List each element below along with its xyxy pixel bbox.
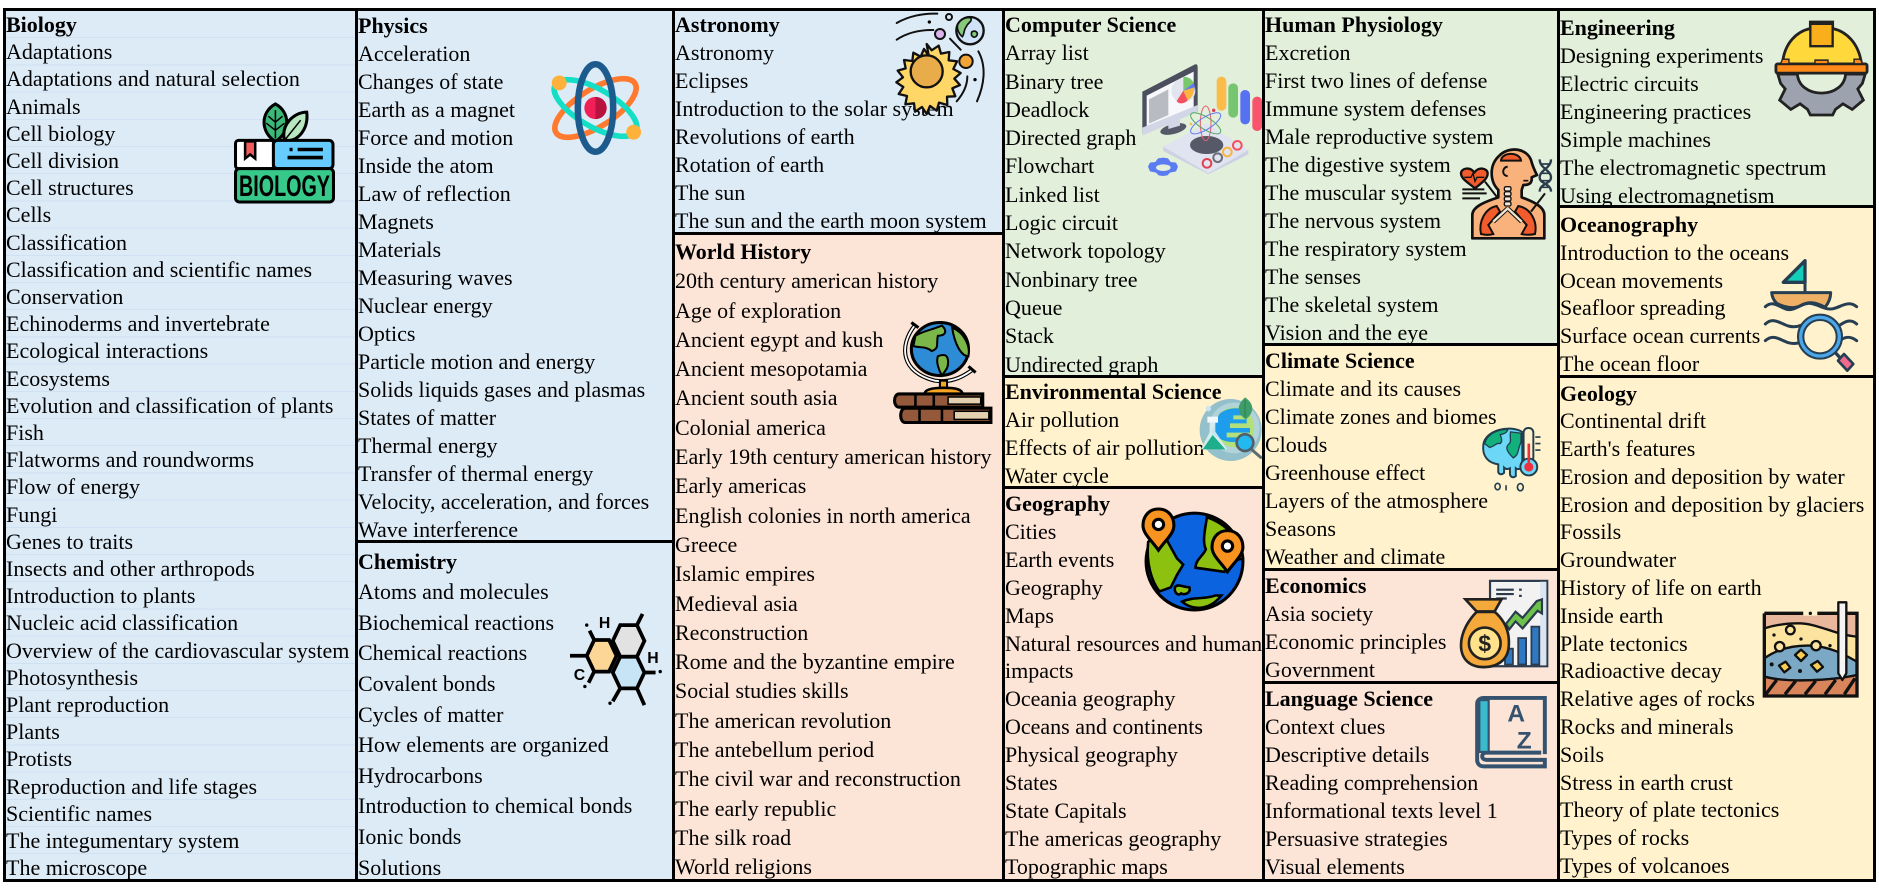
topic list: Geography: Earth events xyxy=(1005,547,1114,572)
heading: Physics: Physics xyxy=(358,13,428,38)
topic list: Computer Science: Undirected graph xyxy=(1005,352,1158,377)
topic list: Computer Science: Nonbinary tree xyxy=(1005,267,1138,292)
topic list: World History: Colonial america xyxy=(675,415,826,440)
topic list: Physics: Inside the atom xyxy=(358,153,494,178)
topic list: Geography: Oceania geography xyxy=(1005,686,1175,711)
heading: Climate Science: Climate Science xyxy=(1265,348,1415,373)
topic list: Computer Science xyxy=(1005,40,1166,377)
topic list: Economics: Government xyxy=(1265,657,1375,682)
topic list: World History: Greece xyxy=(675,532,737,557)
topic list: Physics: Force and motion xyxy=(358,125,513,150)
icon: globe on books xyxy=(893,321,992,424)
topic list: Geology: History of life on earth xyxy=(1560,575,1762,600)
topic list: Biology: Ecological interactions xyxy=(6,338,208,363)
topic list: World History: The american revolution xyxy=(675,708,891,733)
topic list: Environmental Science: Air pollution xyxy=(1005,407,1119,432)
topic list: Geography: Maps xyxy=(1005,603,1054,628)
heading: Language Science: Language Science xyxy=(1265,686,1433,711)
topic list: Chemistry: Covalent bonds xyxy=(358,671,496,696)
panel: Chemistry xyxy=(358,543,672,879)
topic list: Computer Science: Stack xyxy=(1005,323,1054,348)
topic list: Biology: Fungi xyxy=(6,502,57,527)
topic list: Geology: Plate tectonics xyxy=(1560,631,1688,656)
topic list: World History: Medieval asia xyxy=(675,591,798,616)
topic list: Biology: Cells xyxy=(6,202,51,227)
topic list: Human Physiology: The senses xyxy=(1265,264,1361,289)
icon: chemistry molecule xyxy=(570,613,662,706)
topic list: Geography: Geography xyxy=(1005,575,1103,600)
topic list: Climate Science: Climate zones and biomes xyxy=(1265,404,1497,429)
topic list: Chemistry: Solutions xyxy=(358,855,441,880)
topic list: Physics: Thermal energy xyxy=(358,433,497,458)
icon: environment flask and earth xyxy=(1200,397,1262,461)
topic list: Engineering: Designing experiments xyxy=(1560,43,1763,68)
panel: Language Science xyxy=(1265,684,1557,879)
icon: engineering helmet and gear xyxy=(1774,20,1868,116)
topic list: Biology xyxy=(6,39,349,880)
topic list: Biology: Introduction to plants xyxy=(6,583,195,608)
topic list: Climate Science xyxy=(1265,376,1497,569)
panel: Oceanography xyxy=(1560,208,1873,375)
topic list: Biology: Conservation xyxy=(6,284,123,309)
topic list: Geography: impacts xyxy=(1005,658,1073,683)
icon: human physiology figure xyxy=(1460,148,1552,240)
topic list: Geology: Groundwater xyxy=(1560,547,1676,572)
topic list: Oceanography: Ocean movements xyxy=(1560,268,1723,293)
topic list: Biology: Fish xyxy=(6,420,44,445)
heading: World History: World History xyxy=(675,239,811,264)
topic list: Biology: The microscope xyxy=(6,855,147,880)
topic list: World History: Rome and the byzantine empire xyxy=(675,649,955,674)
topic list: World History: The antebellum period xyxy=(675,737,874,762)
topic list: Economics: Asia society xyxy=(1265,601,1373,626)
topic list: Biology: The integumentary system xyxy=(6,828,239,853)
heading: Engineering: Engineering xyxy=(1560,15,1675,40)
icon: computer science workstation xyxy=(1142,64,1262,176)
topic list: Human Physiology: Male reproductive system xyxy=(1265,124,1494,149)
heading: Human Physiology: Human Physiology xyxy=(1265,12,1443,37)
topic list: Physics: Acceleration xyxy=(358,41,470,66)
topic list: Biology: Plants xyxy=(6,719,60,744)
icon: chemistry molecule: C xyxy=(574,667,585,684)
topic list: Computer Science: Logic circuit xyxy=(1005,210,1118,235)
topic list: Geography: Cities xyxy=(1005,519,1056,544)
topic list: Biology: Plant reproduction xyxy=(6,692,169,717)
topic list: Astronomy: Astronomy xyxy=(675,40,774,65)
topic list: Human Physiology: Immune system defenses xyxy=(1265,96,1486,121)
topic list: Human Physiology xyxy=(1265,40,1494,345)
topic list: Geology xyxy=(1560,408,1864,878)
topic list: Chemistry: Biochemical reactions xyxy=(358,610,554,635)
topic list: Computer Science: Flowchart xyxy=(1005,153,1094,178)
topic list: Computer Science: Array list xyxy=(1005,40,1089,65)
topic list: Astronomy: The sun xyxy=(675,180,745,205)
topic list: Geology: Types of volcanoes xyxy=(1560,853,1730,878)
icon: oceanography boat and magnifier xyxy=(1764,259,1858,372)
icon: chemistry molecule: H xyxy=(647,650,659,667)
topic list: Language Science: Informational texts level 1 xyxy=(1265,798,1498,823)
topic list: Astronomy xyxy=(675,40,987,233)
panel: Economics xyxy=(1265,571,1557,681)
topic list: Chemistry: Chemical reactions xyxy=(358,640,527,665)
icon: language A to Z book xyxy=(1475,696,1547,768)
topic list: Computer Science: Binary tree xyxy=(1005,69,1103,94)
heading: Geology: Geology xyxy=(1560,380,1637,406)
topic list: Human Physiology: Vision and the eye xyxy=(1265,320,1428,345)
topic list: World History: The silk road xyxy=(675,825,791,850)
icon: language A to Z book: A xyxy=(1507,701,1525,728)
topic list: Oceanography: Surface ocean currents xyxy=(1560,323,1760,348)
topic list: World History: Ancient egypt and kush xyxy=(675,327,883,352)
topic list: Engineering: The electromagnetic spectrum xyxy=(1560,155,1826,180)
topic list: Oceanography xyxy=(1560,240,1789,376)
panel: Computer Science xyxy=(1005,11,1262,375)
icon: solar system xyxy=(895,12,985,116)
topic list: Computer Science: Deadlock xyxy=(1005,97,1089,122)
topic list: Physics xyxy=(358,41,649,542)
heading: Computer Science: Computer Science xyxy=(1005,12,1176,37)
topic list: World History: Early americas xyxy=(675,473,806,498)
topic list: Geology: Erosion and deposition by water xyxy=(1560,464,1845,489)
topic list: World History: 20th century american history xyxy=(675,268,938,293)
topic list: Physics: Law of reflection xyxy=(358,181,511,206)
topic list: Engineering xyxy=(1560,43,1826,208)
topic list: World History: Ancient mesopotamia xyxy=(675,356,867,381)
topic list: Geography: Physical geography xyxy=(1005,742,1178,767)
topic list: Computer Science: Queue xyxy=(1005,295,1062,320)
topic list: Biology: Flow of energy xyxy=(6,474,140,499)
topic list: Human Physiology: First two lines of defense xyxy=(1265,68,1487,93)
heading: Oceanography: Oceanography xyxy=(1560,212,1698,237)
topic list: Language Science xyxy=(1265,714,1498,879)
topic list: Economics: Economic principles xyxy=(1265,629,1446,654)
topic list: Human Physiology: The respiratory system xyxy=(1265,236,1467,261)
topic list: World History: Ancient south asia xyxy=(675,385,838,410)
topic list: Biology: Cell structures xyxy=(6,175,134,200)
topic list: Geology: Fossils xyxy=(1560,519,1621,544)
topic list: Geography xyxy=(1005,519,1262,879)
icon: atom xyxy=(551,61,642,155)
panel: Environmental Science xyxy=(1005,378,1262,486)
topic list: Climate Science: Weather and climate xyxy=(1265,544,1445,569)
panel: Physics xyxy=(358,11,672,540)
topic list: Biology: Protists xyxy=(6,746,72,771)
topic list: Physics: Particle motion and energy xyxy=(358,349,595,374)
panel: World History xyxy=(675,235,1002,879)
topic list: Geology: Rocks and minerals xyxy=(1560,714,1734,739)
topic list: Human Physiology: The digestive system xyxy=(1265,152,1451,177)
topic list: Biology: Animals xyxy=(6,94,81,119)
topic list: Computer Science: Directed graph xyxy=(1005,125,1136,150)
heading: Chemistry: Chemistry xyxy=(358,549,457,574)
topic list: Environmental Science: Effects of air pollution xyxy=(1005,435,1204,460)
topic list: Physics: Magnets xyxy=(358,209,434,234)
topic list: World History: The early republic xyxy=(675,796,836,821)
topic list: Chemistry: Introduction to chemical bonds xyxy=(358,793,632,818)
icon: biology book and leaves xyxy=(234,102,335,204)
topic list: Language Science: Visual elements xyxy=(1265,854,1405,879)
topic list: Biology: Insects and other arthropods xyxy=(6,556,255,581)
panel: Geography xyxy=(1005,489,1262,879)
topic list: Chemistry: How elements are organized xyxy=(358,732,609,757)
topic list: Language Science: Context clues xyxy=(1265,714,1385,739)
topic list: World History: Early 19th century american history xyxy=(675,444,991,469)
panel: Climate Science xyxy=(1265,346,1557,568)
topic list: Geology: Radioactive decay xyxy=(1560,658,1722,683)
heading: Economics: Economics xyxy=(1265,573,1366,598)
topic list: World History xyxy=(675,268,992,879)
topic list: Physics: Earth as a magnet xyxy=(358,97,515,122)
topic list: Geology: Theory of plate tectonics xyxy=(1560,797,1779,822)
topic list: Engineering: Electric circuits xyxy=(1560,71,1699,96)
topic list: Biology: Classification and scientific names xyxy=(6,257,312,282)
topic list: Biology: Reproduction and life stages xyxy=(6,774,257,799)
topic list: Engineering: Engineering practices xyxy=(1560,99,1751,124)
topic list: Biology: Echinoderms and invertebrate xyxy=(6,311,270,336)
topic list: World History: Reconstruction xyxy=(675,620,808,645)
topic list: Computer Science: Network topology xyxy=(1005,238,1166,263)
topic list: Physics: Wave interference xyxy=(358,517,518,542)
heading: Biology: Biology xyxy=(6,12,77,37)
topic list: Biology: Cell biology xyxy=(6,121,115,146)
topic list: Biology: Cell division xyxy=(6,148,119,173)
topic list: Biology: Adaptations xyxy=(6,39,112,64)
topic list: Climate Science: Clouds xyxy=(1265,432,1327,457)
topic list: Biology: Ecosystems xyxy=(6,366,110,391)
topic list: Astronomy: Rotation of earth xyxy=(675,152,824,177)
topic list: Biology: Overview of the cardiovascular system xyxy=(6,638,349,663)
topic list: World History: Age of exploration xyxy=(675,298,841,323)
topic list: Language Science: Reading comprehension xyxy=(1265,770,1478,795)
topic list: Economics xyxy=(1265,601,1446,682)
topic list: Chemistry: Ionic bonds xyxy=(358,824,461,849)
topic list: Physics: Nuclear energy xyxy=(358,293,493,318)
topic list: Astronomy: Revolutions of earth xyxy=(675,124,855,149)
topic list: Geography: Natural resources and human xyxy=(1005,631,1262,656)
topic list: Geology: Inside earth xyxy=(1560,603,1663,628)
topic list: Geology: Continental drift xyxy=(1560,408,1706,433)
heading: Astronomy: Astronomy xyxy=(675,12,780,37)
topic list: Human Physiology: The nervous system xyxy=(1265,208,1441,233)
topic list: Chemistry xyxy=(358,579,632,880)
topic list: Geology: Types of rocks xyxy=(1560,825,1689,850)
topic list: Physics: Velocity, acceleration, and forces xyxy=(358,489,649,514)
panel: Geology xyxy=(1560,378,1873,879)
topic list: Oceanography: The ocean floor xyxy=(1560,351,1699,376)
topic list: Geography: State Capitals xyxy=(1005,798,1127,823)
topic list: Language Science: Descriptive details xyxy=(1265,742,1429,767)
topic list: Physics: Changes of state xyxy=(358,69,503,94)
topic list: Chemistry: Hydrocarbons xyxy=(358,763,483,788)
topic list: Physics: Transfer of thermal energy xyxy=(358,461,593,486)
topic list: Biology: Classification xyxy=(6,230,127,255)
icon: geology soil layers xyxy=(1762,601,1859,698)
panel: Engineering xyxy=(1560,11,1873,205)
topic list: Physics: Solids liquids gases and plasmas xyxy=(358,377,645,402)
topic list: Astronomy: Introduction to the solar system xyxy=(675,96,954,121)
topic list: World History: Islamic empires xyxy=(675,561,815,586)
topic list: Environmental Science: Water cycle xyxy=(1005,463,1109,488)
topic list: Biology: Photosynthesis xyxy=(6,665,138,690)
topic list: Chemistry: Cycles of matter xyxy=(358,702,503,727)
topic list: Physics: Measuring waves xyxy=(358,265,513,290)
topic list: Climate Science: Climate and its causes xyxy=(1265,376,1461,401)
topic list: Computer Science: Linked list xyxy=(1005,182,1100,207)
topic list: Oceanography: Seafloor spreading xyxy=(1560,295,1726,320)
topic list: Climate Science: Layers of the atmosphere xyxy=(1265,488,1488,513)
topic list: Biology: Evolution and classification of plants xyxy=(6,393,334,418)
topic list: Geology: Stress in earth crust xyxy=(1560,770,1733,795)
topic list: Geology: Relative ages of rocks xyxy=(1560,686,1755,711)
topic list: Chemistry: Atoms and molecules xyxy=(358,579,549,604)
topic list: Physics: States of matter xyxy=(358,405,496,430)
panel: Astronomy xyxy=(675,11,1002,232)
topic list: World History: World religions xyxy=(675,854,812,879)
topic list: Biology: Genes to traits xyxy=(6,529,133,554)
icon: climate melting earth and thermometer xyxy=(1482,427,1540,492)
topic list: Climate Science: Greenhouse effect xyxy=(1265,460,1425,485)
icon: language A to Z book: Z xyxy=(1517,727,1532,754)
topic list: World History: Social studies skills xyxy=(675,678,849,703)
icon: biology book and leaves: BIOLOGY xyxy=(239,170,330,203)
topic list: Geography: Oceans and continents xyxy=(1005,714,1203,739)
topic list: Geology: Erosion and deposition by glaciers xyxy=(1560,492,1864,517)
panel: Biology xyxy=(6,11,355,879)
topic list: Environmental Science xyxy=(1005,407,1204,488)
topic list: Biology: Adaptations and natural selection xyxy=(6,66,300,91)
topic list: Geology: Soils xyxy=(1560,742,1604,767)
icon: geography globe with pins xyxy=(1141,508,1244,612)
heading: Geography: Geography xyxy=(1005,491,1110,516)
topic list: Engineering: Simple machines xyxy=(1560,127,1711,152)
topic list: Geography: States xyxy=(1005,770,1058,795)
icon: economics money bag and chart xyxy=(1460,580,1548,668)
topic list: Geology: Earth's features xyxy=(1560,436,1695,461)
topic list: Physics: Materials xyxy=(358,237,441,262)
topic list: Astronomy: Eclipses xyxy=(675,68,748,93)
topic list: Language Science: Persuasive strategies xyxy=(1265,826,1448,851)
topic list: World History: The civil war and reconstruction xyxy=(675,766,961,791)
icon: economics money bag and chart: $ xyxy=(1478,630,1491,656)
topic list: Geography: Topographic maps xyxy=(1005,854,1168,879)
topic list: Climate Science: Seasons xyxy=(1265,516,1336,541)
topic list: Biology: Nucleic acid classification xyxy=(6,610,238,635)
topic list: Engineering: Using electromagnetism xyxy=(1560,183,1774,208)
heading: Environmental Science: Environmental Science xyxy=(1005,379,1222,404)
topic list: Human Physiology: The skeletal system xyxy=(1265,292,1439,317)
topic list: World History: English colonies in north america xyxy=(675,503,971,528)
icon: chemistry molecule: H xyxy=(599,615,610,632)
topic list: Human Physiology: Excretion xyxy=(1265,40,1351,65)
topic list: Oceanography: Introduction to the oceans xyxy=(1560,240,1789,265)
topic list: Astronomy: The sun and the earth moon system xyxy=(675,208,987,233)
topic list: Physics: Optics xyxy=(358,321,415,346)
topic list: Human Physiology: The muscular system xyxy=(1265,180,1452,205)
panel: Human Physiology xyxy=(1265,11,1557,343)
topic list: Geography: The americas geography xyxy=(1005,826,1221,851)
topic list: Biology: Scientific names xyxy=(6,801,152,826)
topic list: Biology: Flatworms and roundworms xyxy=(6,447,254,472)
